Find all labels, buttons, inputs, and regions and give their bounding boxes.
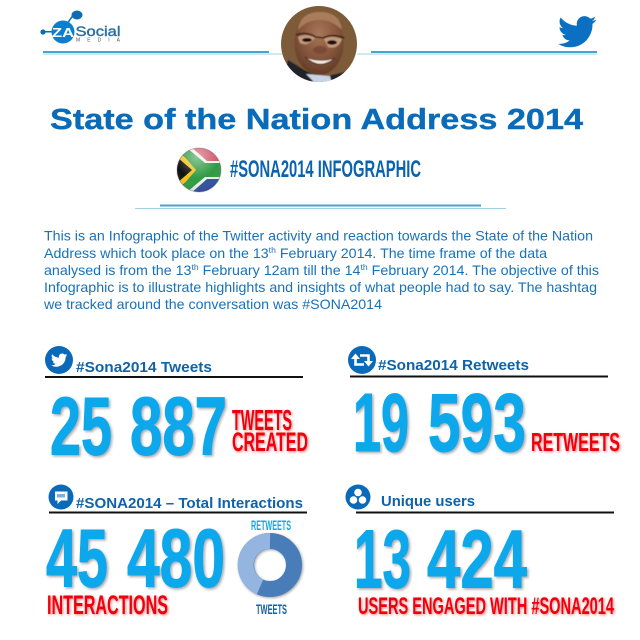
header rule left [43,51,283,54]
label: tweets created: TWEETS [232,405,292,437]
heading: unique users: Unique users [381,493,475,510]
number: retweets: 19 [353,376,409,469]
rule: total interactions [49,512,307,514]
number: unique users: 424 [427,512,527,606]
intro paragraph: th [191,262,199,272]
intro paragraph: February 12am till the 14 [199,262,361,278]
icon: twitter circle [45,346,73,374]
donut chart [246,517,294,617]
rule: unique users [356,512,614,514]
logo: ZA Social Media: ZA [52,25,75,40]
icon: speech bubble circle [48,484,74,510]
intro paragraph: we tracked around the conversation was #SONA2014 [43,296,382,312]
number: tweets [50,380,227,472]
rule: retweets [350,376,608,378]
intro paragraph: analysed is from the 13 [44,262,189,278]
label: tweets created: CREATED [232,427,308,457]
legend: retweets: RETWEETS [251,517,291,533]
legend: tweets: TWEETS [256,601,287,617]
number: retweets [353,376,526,469]
header rule right [357,51,597,54]
intro paragraph: Address which took place on the 13 [44,245,265,261]
number: interactions: 480 [127,512,225,604]
intro paragraph: February 2014. The time frame of the data [276,245,547,261]
icon: users circle [346,484,370,510]
subtitle rule [135,204,506,209]
logo: ZA Social Media: Social [76,23,120,39]
intro paragraph: th [360,262,368,272]
donut rings [246,541,294,589]
intro paragraph: This is an Infographic of the Twitter activity and reaction towards the State of the Nation [44,228,593,244]
title: State of the Nation Address 2014 [50,104,583,136]
label: tweets created [232,405,308,457]
number: unique users [354,512,527,606]
icon: twitter bird [558,16,596,47]
number: retweets: 593 [428,376,526,469]
number: tweets: 887 [130,380,227,472]
icon: South African flag [177,146,223,194]
number: tweets: 25 [50,380,112,472]
panel: total interactions [46,484,307,620]
intro paragraph: Infographic is to illustrate highlights and insights of what people had to say. The hashtag [44,279,597,295]
subtitle: #SONA2014 INFOGRAPHIC [230,156,421,183]
number: unique users: 13 [354,512,411,606]
intro paragraph: February 2014. The objective of this [368,262,599,278]
logo: ZA Social Media: MEDIA [76,38,121,44]
logo: ZA Social Media [40,10,121,44]
number: interactions [46,512,225,604]
heading: tweets: #Sona2014 Tweets [76,359,212,376]
intro paragraph [43,228,599,312]
number: interactions: 45 [46,512,108,604]
heading: retweets: #Sona2014 Retweets [378,357,529,374]
portrait [280,4,360,84]
panel: unique users [346,484,614,620]
panel: retweets [348,346,620,469]
heading: total interactions: #SONA2014 – Total Interactions [76,495,303,512]
intro paragraph: th [269,245,276,255]
label: interactions: INTERACTIONS [47,590,168,620]
panel: tweets [45,346,308,472]
icon: retweet circle [348,346,376,374]
rule: tweets [45,376,303,378]
